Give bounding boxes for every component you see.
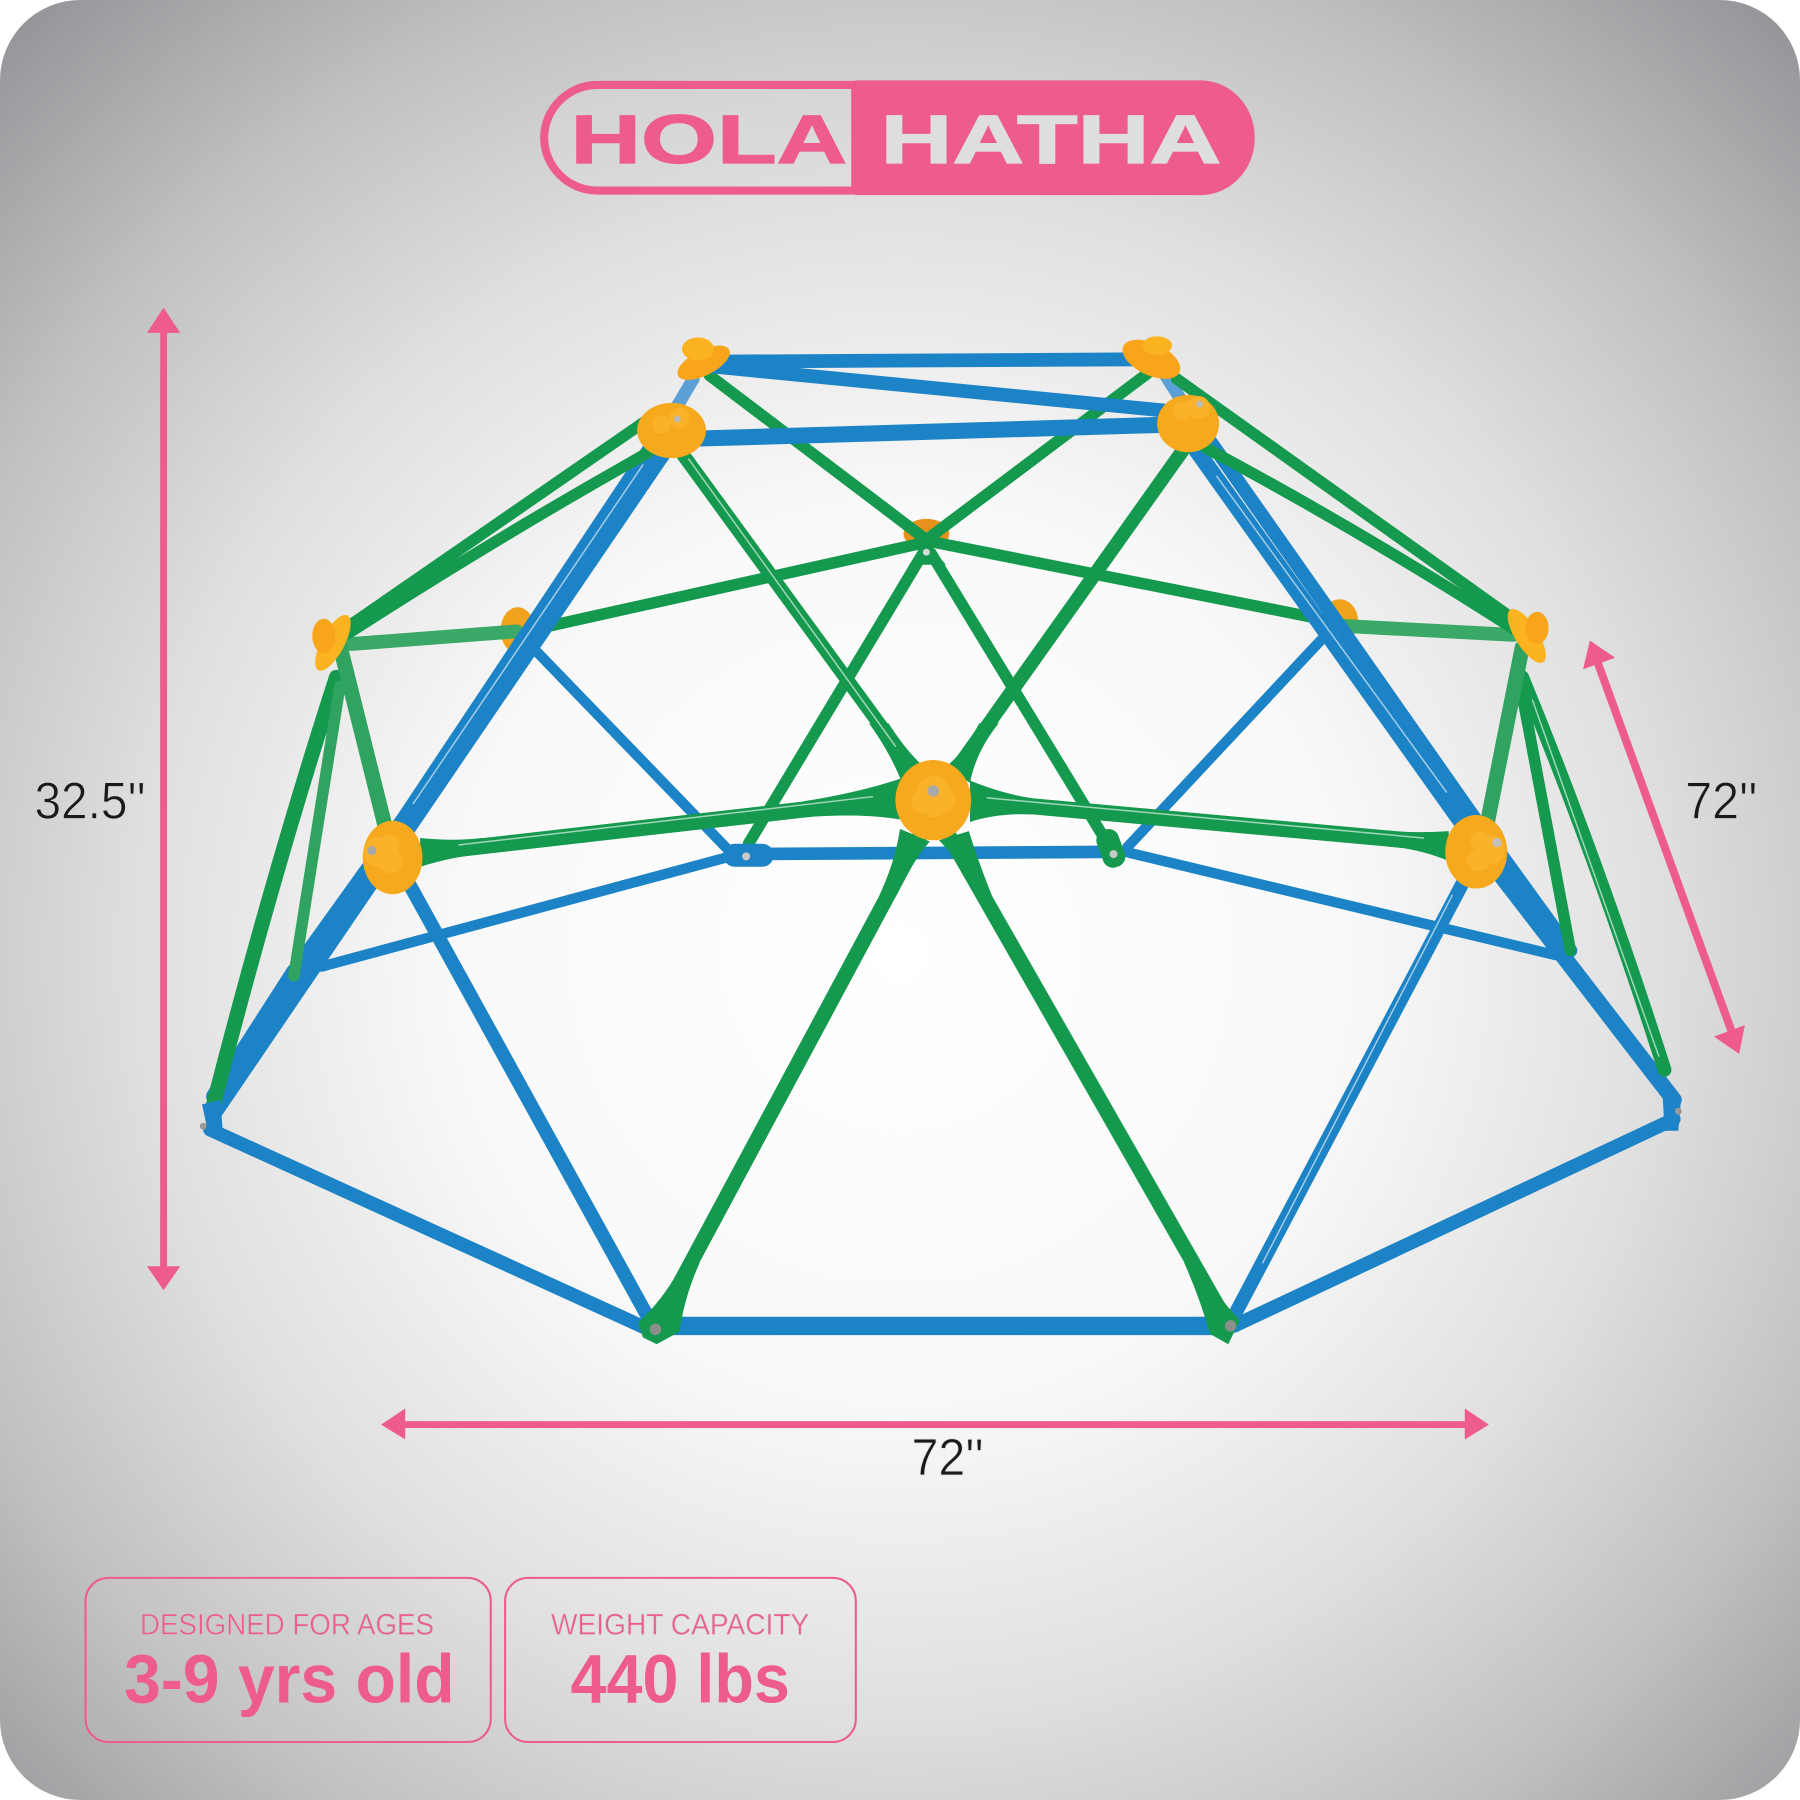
front blue struts	[210, 875, 1674, 1329]
logo: HolaHatha: HATHA	[880, 101, 1221, 178]
age value: 3-9 yrs old	[124, 1640, 455, 1717]
logo: HolaHatha	[544, 80, 1255, 195]
side label: 72''	[1685, 771, 1758, 829]
cap: top front right	[1157, 395, 1219, 452]
logo: HolaHatha: HOLA	[571, 101, 847, 178]
back yellow nodes	[501, 519, 1358, 653]
green right side struts	[1177, 379, 1665, 1070]
pale top side brackets	[672, 370, 1182, 416]
width arrow	[381, 1409, 1489, 1440]
front green struts	[413, 448, 1458, 1320]
width label: 72''	[911, 1428, 984, 1486]
cap: front left	[363, 821, 422, 894]
cap: far left	[308, 610, 358, 676]
cap: far right	[1501, 604, 1553, 668]
dome climber	[200, 332, 1682, 1344]
cap: top front left	[637, 403, 706, 458]
back blue struts	[321, 359, 1555, 967]
info box: age	[86, 1578, 491, 1742]
back pale green struts	[351, 626, 1513, 644]
back joint plates	[723, 542, 1128, 871]
age caption: DESIGNED FOR AGES	[140, 1609, 434, 1642]
cap: front right	[1445, 815, 1507, 889]
base joints	[200, 1088, 1682, 1344]
yellow connector caps	[308, 332, 1553, 894]
height label: 32.5''	[34, 771, 146, 829]
info box: weight	[505, 1578, 856, 1742]
green left side struts	[214, 419, 649, 1104]
blue long side struts	[214, 402, 1674, 1111]
green tube flares at centre joint	[420, 723, 1449, 895]
height arrow	[147, 308, 180, 1290]
cap: front centre	[895, 760, 971, 840]
back green struts	[530, 370, 1337, 849]
weight caption: WEIGHT CAPACITY	[551, 1609, 809, 1642]
tube highlights	[413, 459, 1659, 1263]
cap: top back right	[1117, 332, 1186, 387]
cap: top back left	[672, 338, 735, 387]
weight value: 440 lbs	[571, 1640, 790, 1717]
side arrow	[1583, 641, 1745, 1054]
front top bar	[700, 425, 1165, 439]
